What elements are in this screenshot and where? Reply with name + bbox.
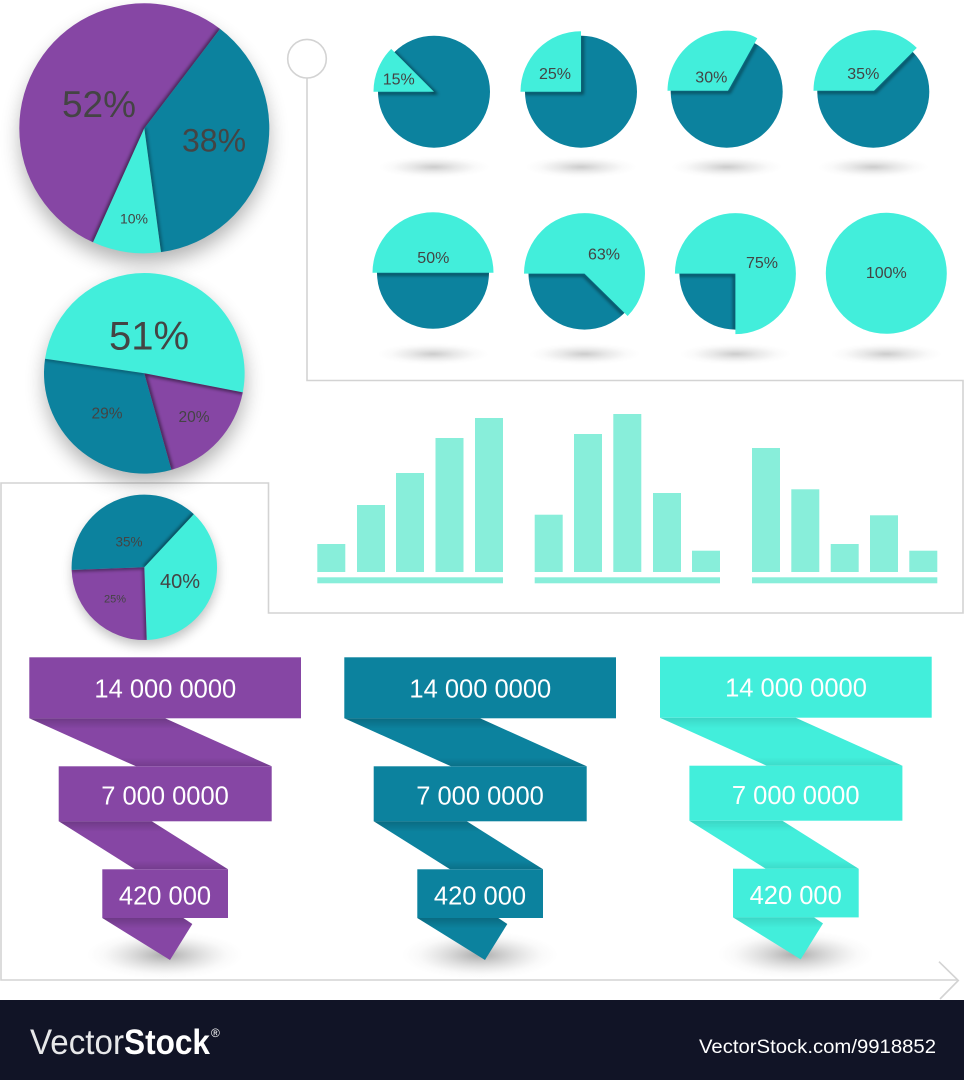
pie chart: 52% 38% 10%: 10%	[120, 210, 148, 226]
ribbon: cyan: 420 000	[750, 882, 842, 910]
footer logo: Stock	[124, 1023, 210, 1062]
pie chart: 51% 29% 20%: 51%	[109, 314, 189, 358]
footer logo: Vector	[30, 1023, 124, 1062]
bar chart: falling	[752, 448, 937, 583]
ribbon: cyan: 14 000 0000	[725, 675, 867, 703]
ribbon: teal: 7 000 0000	[416, 783, 544, 811]
pie chart: 52% 38% 10%: 52%	[62, 84, 136, 125]
pie chart: 40% 35% 25%: 40%	[160, 571, 200, 593]
small pie: 25%	[520, 31, 637, 178]
footer logo	[30, 1023, 220, 1062]
ribbon: purple	[29, 657, 301, 979]
small pie: 100%: 100%	[866, 265, 907, 282]
bar chart: rising	[317, 418, 503, 583]
ribbon: purple: 7 000 0000	[101, 783, 229, 811]
small pie: 63%: 63%	[588, 247, 620, 264]
small pie: 75%	[674, 213, 796, 365]
ribbon: cyan	[660, 657, 932, 978]
small pie: 15%: 15%	[383, 71, 415, 88]
ribbon: purple: 420 000	[119, 883, 211, 911]
small pie: 30%	[668, 31, 783, 178]
ribbon: cyan: 7 000 0000	[732, 782, 860, 810]
ribbon: teal: 14 000 0000	[409, 675, 551, 703]
ribbon: teal: 420 000	[434, 883, 526, 911]
pie chart: 51% 29% 20%	[44, 273, 245, 483]
pie chart: 52% 38% 10%	[19, 3, 269, 263]
small pie: 35%	[814, 30, 929, 178]
ribbon: purple: 14 000 0000	[94, 675, 236, 703]
pie chart: 51% 29% 20%: 20%	[178, 409, 210, 426]
pie chart: 40% 35% 25%: 35%	[115, 534, 143, 550]
ribbon: teal	[344, 657, 616, 979]
small pie: 15%	[374, 36, 490, 178]
pie chart: 51% 29% 20%: 29%	[91, 406, 123, 422]
pie chart: 40% 35% 25%: 25%	[104, 593, 126, 605]
small pie: 100%	[826, 213, 947, 365]
footer bar	[0, 1000, 964, 1080]
pie chart: 52% 38% 10%: 38%	[182, 122, 246, 158]
pie chart: 40% 35% 25%	[72, 495, 217, 645]
small pie: 63%	[524, 213, 645, 365]
bar chart: peak	[535, 414, 720, 583]
small pie: 75%: 75%	[746, 255, 778, 272]
small pie: 50%: 50%	[417, 250, 449, 267]
small pie: 35%: 35%	[847, 66, 879, 83]
footer logo: ®	[211, 1026, 220, 1040]
small pie: 50%	[372, 212, 494, 365]
footer url: VectorStock.com/9918852	[699, 1036, 936, 1058]
small pie: 30%: 30%	[695, 69, 727, 86]
small pie: 25%: 25%	[539, 66, 571, 83]
